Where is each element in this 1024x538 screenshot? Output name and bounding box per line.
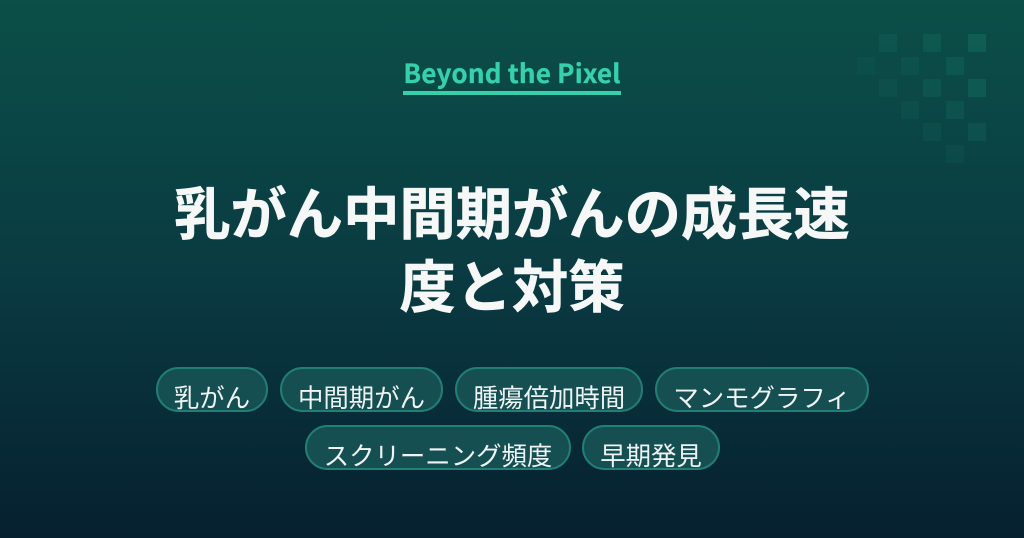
tag: 乳がん: 乳がん	[174, 379, 250, 415]
decorative pixel grid icon	[879, 34, 986, 141]
tag: 乳がん	[156, 367, 268, 412]
tag: マンモグラフィ: マンモグラフィ	[673, 379, 851, 415]
title: 乳がん中間期がんの成長速	[174, 170, 850, 251]
title: 度と対策	[399, 243, 625, 324]
tag: 中間期がん: 中間期がん	[298, 379, 425, 415]
tag: 腫瘍倍加時間	[455, 367, 643, 412]
brand label: Beyond the Pixel: Beyond the Pixel	[403, 54, 621, 91]
tag: 早期発見: 早期発見	[600, 437, 702, 473]
tag: スクリーニング頻度	[305, 425, 571, 470]
tag: 中間期がん	[280, 367, 443, 412]
title	[174, 170, 850, 324]
tag: スクリーニング頻度: スクリーニング頻度	[324, 437, 552, 473]
tag: 早期発見	[582, 425, 720, 470]
keyword tags	[156, 367, 869, 473]
tag: マンモグラフィ	[655, 367, 869, 412]
tag: 腫瘍倍加時間: 腫瘍倍加時間	[473, 379, 625, 415]
